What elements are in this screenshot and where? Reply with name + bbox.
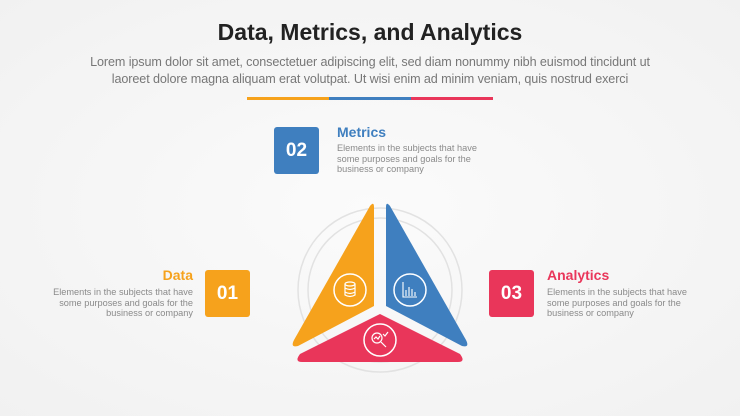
box 01 <box>205 270 250 317</box>
box 01: 01 <box>217 282 238 304</box>
subtitle: laoreet dolore magna aliquam erat volutpat. Ut wisi enim ad minim veniam, quis nostrud exerci <box>112 72 628 86</box>
box 03 <box>489 270 534 317</box>
box 02 <box>274 127 319 174</box>
desc data: Elements in the subjects that have some purposes and goals for the business or company <box>53 287 193 318</box>
desc metrics: Elements in the subjects that have some purposes and goals for the business or company <box>337 143 477 174</box>
heading data: Data <box>163 267 193 283</box>
item 01 data <box>53 267 250 318</box>
item 02 metrics <box>274 124 477 174</box>
item 03 analytics <box>489 267 687 318</box>
subtitle: Lorem ipsum dolor sit amet, consectetuer adipiscing elit, sed diam nonummy nibh euismod tincidunt ut <box>90 55 650 69</box>
title: Data, Metrics, and Analytics <box>218 19 522 45</box>
segment blue <box>386 204 467 346</box>
heading metrics: Metrics <box>337 124 386 140</box>
color underline <box>247 97 493 100</box>
segment red <box>297 314 463 362</box>
segment orange <box>293 204 374 346</box>
box 03: 03 <box>501 282 522 304</box>
heading analytics: Analytics <box>547 267 609 283</box>
desc analytics: Elements in the subjects that have some purposes and goals for the business or company <box>547 287 687 318</box>
box 02: 02 <box>286 140 307 160</box>
subtitle <box>90 55 650 86</box>
